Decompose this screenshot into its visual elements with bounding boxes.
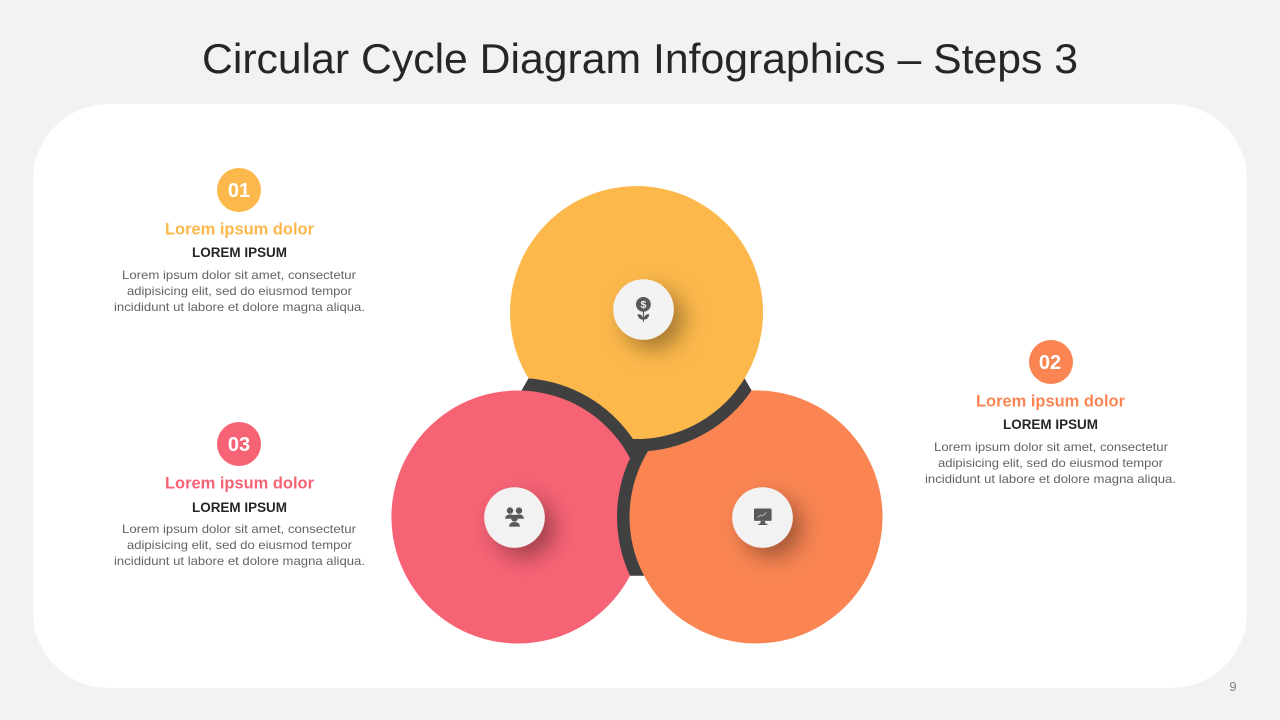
subheading 1: LOREM IPSUM — [192, 245, 287, 260]
body text 3: adipisicing elit, sed do eiusmod tempor — [127, 539, 352, 552]
body text 3: incididunt ut labore et dolore magna aliqua. — [114, 555, 365, 568]
body text 2: incididunt ut labore et dolore magna aliqua. — [925, 473, 1176, 486]
heading 1: Lorem ipsum dolor — [165, 220, 315, 238]
body text 2: adipisicing elit, sed do eiusmod tempor — [938, 457, 1163, 470]
circle: orange step 2 — [630, 390, 883, 643]
cycle diagram — [391, 186, 883, 644]
badge 03 — [217, 422, 261, 466]
body text 1: Lorem ipsum dolor sit amet, consectetur — [122, 269, 356, 282]
badge 01 — [217, 168, 261, 212]
step 1 text block — [114, 168, 365, 314]
body text 2 — [925, 441, 1176, 486]
subheading 2: LOREM IPSUM — [1003, 417, 1098, 432]
subheading 3: LOREM IPSUM — [192, 500, 287, 515]
body text 1 — [114, 269, 365, 314]
page number: 9 — [1229, 679, 1237, 694]
heading 3: Lorem ipsum dolor — [165, 474, 315, 492]
circle: pink step 3 — [391, 390, 630, 644]
body text 3 — [114, 523, 365, 568]
body text 1: incididunt ut labore et dolore magna aliqua. — [114, 301, 365, 314]
heading 2: Lorem ipsum dolor — [976, 392, 1126, 410]
badge 02: 02 — [1039, 352, 1061, 374]
badge 01: 01 — [228, 180, 250, 202]
body text 3: Lorem ipsum dolor sit amet, consectetur — [122, 523, 356, 536]
title: Circular Cycle Diagram Infographics – Steps 3 — [202, 35, 1078, 82]
dark connecting band — [522, 378, 752, 576]
icon: money plant badge: $ — [640, 299, 646, 311]
circle: yellow step 1 — [510, 186, 763, 439]
icon: money plant badge — [613, 279, 674, 340]
step 3 text block — [114, 422, 365, 568]
badge 03: 03 — [228, 434, 250, 456]
icon: monitor chart badge — [732, 487, 793, 548]
panel: white background card — [33, 104, 1247, 688]
body text 1: adipisicing elit, sed do eiusmod tempor — [127, 285, 352, 298]
step 2 text block — [925, 340, 1176, 486]
body text 2: Lorem ipsum dolor sit amet, consectetur — [934, 441, 1168, 454]
icon: people group badge — [484, 487, 545, 548]
badge 02 — [1029, 340, 1073, 384]
